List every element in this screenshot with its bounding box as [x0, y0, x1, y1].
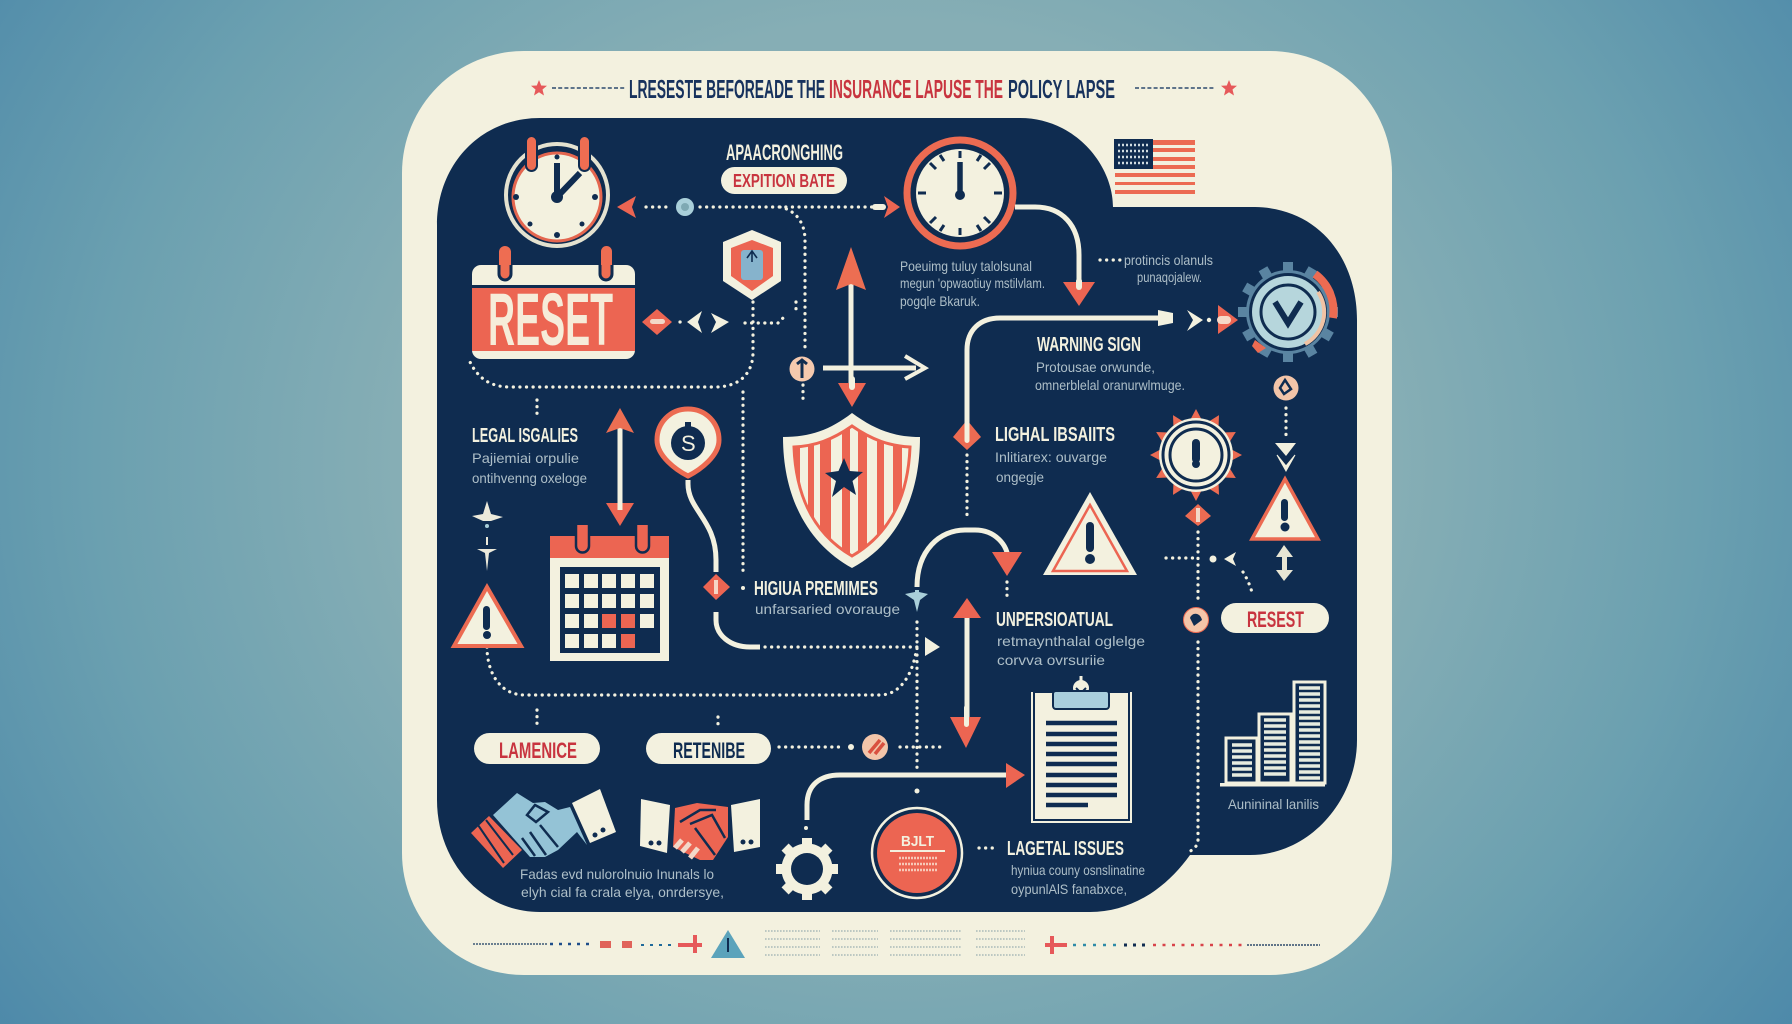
text block: handshake caption — [520, 866, 724, 900]
icon: warning triangle left — [454, 587, 521, 646]
heading: approaching expiration date — [721, 140, 847, 194]
text block: clock note: Poeuimg tuluy talolsunal — [900, 258, 1032, 274]
icon: red seal badge: BJLT — [901, 833, 934, 850]
icon: clock with pegs — [506, 136, 608, 246]
text block: unpersonal — [996, 609, 1145, 668]
icon: american flag — [1114, 139, 1195, 194]
text block: handshake caption: Fadas evd nulorolnuio Inunals lo — [520, 866, 714, 882]
text block: legal liabilities: ongegje — [996, 469, 1044, 485]
text block: legal issues left: LEGAL ISGALIES — [472, 425, 578, 447]
text block: clock note: pogqle Bkaruk. — [900, 293, 980, 309]
pill: reset — [1221, 603, 1329, 633]
title: INSURANCE LAPUSE THE — [829, 74, 1003, 104]
text block: higher premiums: HIGIUA PREMIMES — [754, 578, 878, 600]
title: LRESESTE BEFOREADE THE — [629, 74, 825, 104]
text block: lagetal issues: LAGETAL ISSUES — [1007, 838, 1124, 860]
icon: right column alert sequence — [1252, 376, 1318, 581]
pill: retenibe: RETENIBE — [673, 738, 745, 763]
arrow: small left arrows — [472, 501, 503, 571]
icon: calendar grid — [550, 525, 669, 661]
text block: higher premiums: unfarsaried ovorauge — [755, 601, 900, 617]
icon: small shield — [723, 230, 781, 300]
arrow: right dotted column — [1166, 504, 1253, 852]
icon: money pin: S — [681, 431, 696, 456]
heading: approaching expiration date: APAACRONGHING — [726, 140, 843, 165]
text block: lagetal issues — [979, 838, 1145, 897]
text block: higher premiums — [741, 578, 900, 617]
arrow: reset connector with dotted loop — [470, 302, 796, 572]
text block: clock note — [900, 258, 1045, 309]
arrow: clock to warning — [1015, 207, 1095, 306]
icon: red seal badge — [872, 808, 962, 898]
pill: lamenice: LAMENICE — [499, 738, 577, 763]
icon: gear check badge — [1238, 262, 1338, 362]
title: POLICY LAPSE — [1008, 74, 1115, 104]
pill: retenibe — [646, 733, 771, 764]
caption: bar chart: Aunininal lanilis — [1228, 796, 1319, 812]
text block: top right note — [1100, 252, 1213, 285]
icon: RESET calendar — [472, 246, 635, 361]
text block: clock note: megun 'opwaotiuy mstilvlam. — [900, 275, 1045, 291]
icon: sunburst alert — [1150, 409, 1242, 501]
icon: red handshake — [640, 799, 760, 860]
icon: blue handshake — [471, 789, 616, 868]
arrow: arc to warning triangle — [905, 530, 1022, 770]
text block: legal liabilities: Inlitiarex: ouvarge — [995, 449, 1107, 465]
panel: cream card — [402, 51, 1392, 975]
text block: warning sign — [1035, 334, 1185, 393]
text block: warning sign: omnerblelal oranurwlmuge. — [1035, 377, 1185, 393]
icon: gear with arrow to clipboard — [776, 763, 1025, 900]
arrow: dotted timeline between clocks — [617, 196, 900, 350]
text block: lagetal issues: oypunlAlS fanabxce, — [1011, 881, 1127, 897]
icon: striped star shield — [783, 413, 920, 568]
arrow: central vertical connectors — [950, 405, 981, 748]
text block: legal liabilities — [995, 424, 1115, 485]
text block: legal issues left — [472, 425, 587, 486]
icon: large clock — [907, 140, 1013, 246]
text block: warning sign: WARNING SIGN — [1037, 334, 1141, 356]
panel: navy flow area — [437, 118, 1357, 912]
arrow: long path to gear badge — [967, 305, 1238, 425]
text block: lagetal issues: hyniua couny osnslinatine — [1011, 862, 1145, 878]
heading: approaching expiration date: EXPITION BATE — [733, 171, 835, 191]
arrow: dotted connectors by pills — [537, 710, 945, 794]
text block: unpersonal: UNPERSIOATUAL — [996, 609, 1113, 631]
footer strip — [473, 930, 1320, 958]
text block: warning sign: Protousae orwunde, — [1036, 359, 1155, 375]
arrow: curve from reset to legal issues — [487, 480, 940, 695]
pill: reset: RESEST — [1247, 607, 1304, 632]
text block: unpersonal: corvva ovrsuriie — [997, 652, 1105, 668]
text block: legal issues left: ontihvenng oxeloge — [472, 470, 587, 486]
text block: legal issues left: Pajiemiai orpulie — [472, 450, 579, 466]
chart: bar chart — [1220, 682, 1325, 786]
icon: RESET calendar: RESET — [488, 278, 613, 361]
text block: top right note: protincis olanuls — [1124, 252, 1213, 268]
icon: large warning triangle — [1043, 492, 1137, 575]
icon: title stars and rules — [531, 80, 1237, 96]
text block: legal liabilities: LIGHAL IBSAIITS — [995, 424, 1115, 446]
icon: money pin — [657, 409, 719, 476]
text block: top right note: punaqojalew. — [1137, 269, 1202, 285]
pill: lamenice — [474, 733, 600, 764]
icon: clipboard — [1031, 676, 1132, 823]
text block: unpersonal: retmaynthalal oglelge — [997, 633, 1145, 649]
arrow: vertical and horizontal cross — [790, 247, 925, 407]
arrow: double vertical near calendar — [606, 408, 634, 526]
text block: handshake caption: elyh cial fa crala elya, onrdersye, — [521, 884, 724, 900]
